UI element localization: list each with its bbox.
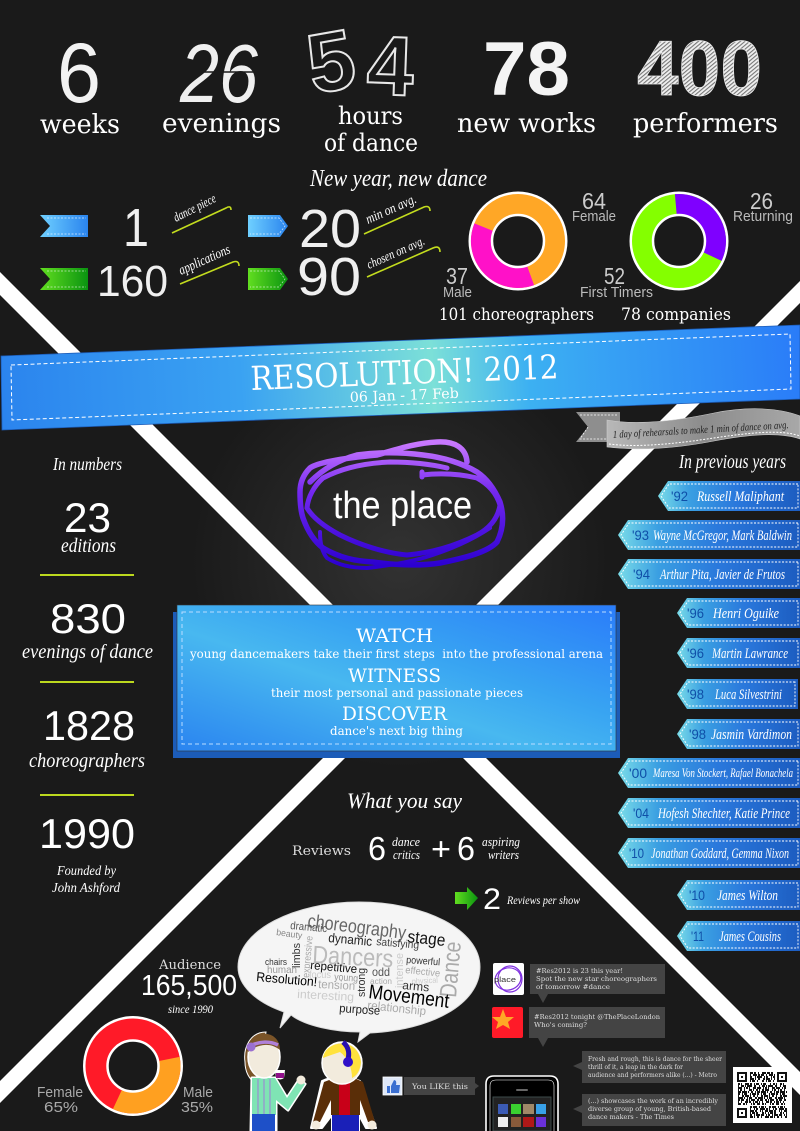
donut: choreographers: Male xyxy=(443,284,472,301)
number 20: 20 xyxy=(299,199,361,259)
stat: 1990 founded: John Ashford xyxy=(52,881,121,896)
note: dance piece: dance piece xyxy=(171,190,218,225)
tag 00 xyxy=(618,758,800,788)
stat: 830 evenings of dance xyxy=(22,595,153,663)
speech bubble word cloud: stage xyxy=(407,927,446,950)
stat: 400 performers: performers xyxy=(633,109,778,139)
donut: choreographers: 37 xyxy=(446,263,468,289)
tag 10 Wilton: '10 xyxy=(689,887,705,903)
stat: 78 new works: new works xyxy=(457,109,596,139)
quote: The Times: (...) showcases the work of an incredibly xyxy=(588,1098,719,1105)
banner: Resolution 2012 xyxy=(1,325,800,430)
stat: 1990 founded xyxy=(39,810,135,896)
tweet: place: of tomorrow #dance xyxy=(536,983,610,991)
process stats xyxy=(40,190,440,307)
tag 94: '94 xyxy=(633,566,650,582)
tag 98 Silvestrini xyxy=(677,679,798,709)
stat: 1828 choreographers: 1828 xyxy=(43,702,135,749)
reviews stats: critics xyxy=(393,847,420,862)
stat: 830 evenings of dance: evenings of dance xyxy=(22,641,153,663)
stat: 1990 founded: 1990 xyxy=(39,810,135,857)
note: chosen on avg: chosen on avg. xyxy=(364,233,427,272)
reviews stats: Reviews per show xyxy=(506,893,580,907)
donut: choreographers: 64 xyxy=(582,188,606,214)
audience stats: 165,500 xyxy=(141,970,237,1002)
speech bubble word cloud: odd xyxy=(372,965,390,979)
totals xyxy=(439,305,731,325)
tag 92 xyxy=(658,481,800,511)
note: min on avg: min on avg. xyxy=(364,192,419,228)
tag 04 xyxy=(618,798,800,828)
number 90: 90 xyxy=(297,247,361,307)
heading: New year, new dance: New year, new dance xyxy=(309,166,487,192)
tweet: tonight xyxy=(492,1007,665,1047)
stat: 400 performers: 400 xyxy=(637,24,762,112)
tag 96 Oguike: Henri Oguike xyxy=(712,606,779,622)
quote: The Times: dance makers - The Times xyxy=(588,1114,674,1121)
stat: 23 editions: editions xyxy=(61,535,116,557)
icon: green arrow xyxy=(455,887,478,910)
stat: 1990 founded: Founded by xyxy=(56,864,117,879)
banner: Resolution 2012: 06 Jan - 17 Feb xyxy=(350,386,459,406)
panel: watch witness discover: DISCOVER xyxy=(342,703,448,725)
tag 98 Vardimon xyxy=(677,719,800,749)
speech bubble word cloud: tension xyxy=(318,977,356,993)
panel: watch witness discover: young dancemakers take their first steps into the professional arena xyxy=(189,646,604,661)
heading: What you say: What you say xyxy=(347,788,462,813)
stat: 78 new works xyxy=(457,27,596,139)
stat: 54 hours of dance: 54 xyxy=(300,11,416,114)
speech bubble word cloud: Resolution! xyxy=(256,969,318,989)
tag 11: '11 xyxy=(691,928,704,944)
tag 96 Oguike: '96 xyxy=(687,605,704,621)
note: dance piece xyxy=(171,190,231,233)
stat: 26 evenings: evenings xyxy=(162,109,281,139)
speech bubble word cloud: limbs xyxy=(291,943,303,968)
speech bubble word cloud: repetitive xyxy=(310,958,358,976)
audience stats xyxy=(141,958,237,1016)
stat: 54 hours of dance xyxy=(300,11,418,157)
grey ribbon note xyxy=(576,409,800,449)
diagonal white cross xyxy=(0,272,800,1103)
audience stats: since 1990 xyxy=(168,1002,213,1016)
figure: woman with wine xyxy=(245,1032,306,1131)
tag 04: '04 xyxy=(633,805,649,821)
tag 10 Goddard: '10 xyxy=(629,845,644,861)
speech bubble word cloud: physical xyxy=(412,976,438,986)
totals: 101 choreographers xyxy=(439,305,594,325)
stat: 54 hours of dance: of dance xyxy=(324,129,418,157)
donut: choreographers xyxy=(443,188,616,301)
reviews stats: dance xyxy=(392,834,420,849)
quote: Metro xyxy=(573,1051,726,1083)
banner: Resolution 2012: RESOLUTION! 2012 xyxy=(250,347,559,398)
speech bubble word cloud: beauty xyxy=(276,927,303,941)
speech bubble word cloud: powerful xyxy=(406,955,440,968)
quote: Metro: Fresh and rough, this is dance for the sheer xyxy=(588,1056,722,1063)
tag 93: '93 xyxy=(632,527,649,543)
speech bubble word cloud: dynamic xyxy=(328,930,373,949)
stat: 830 evenings of dance: 830 xyxy=(50,595,126,642)
reviews stats: 2 xyxy=(483,883,501,916)
figure: man with headphones xyxy=(311,1042,376,1131)
panel: watch witness discover: WATCH xyxy=(356,625,433,647)
reviews stats: + xyxy=(431,831,451,867)
tag 10 Wilton: James Wilton xyxy=(717,888,778,904)
quote: Metro: thrill of it, a leap in the dark for xyxy=(588,1064,683,1071)
reviews stats xyxy=(292,830,580,916)
stat: 6 weeks: weeks xyxy=(40,110,120,140)
quote: Metro: audience and performers alike (...) - Metro xyxy=(588,1072,717,1079)
note: applications xyxy=(177,242,239,284)
panel: watch witness discover xyxy=(173,605,620,758)
tag 96 Oguike xyxy=(677,598,800,628)
speech bubble word cloud: Dance xyxy=(435,940,467,999)
donut: companies: 26 xyxy=(750,188,773,214)
donut: audience: Male xyxy=(183,1084,213,1101)
list: previous years tags xyxy=(618,481,800,951)
speech bubble word cloud: young xyxy=(334,972,358,985)
stat: 78 new works: 78 xyxy=(483,27,570,112)
tweet: place: #Res2012 is 23 this year! xyxy=(536,967,623,975)
panel: watch witness discover: dance's next big thing xyxy=(330,723,463,738)
speech bubble word cloud: chairs xyxy=(265,957,287,967)
QR code xyxy=(733,1067,792,1123)
quote: The Times: diverse group of young, British-based xyxy=(588,1106,711,1113)
speech bubble word cloud: effective xyxy=(405,965,441,980)
logo: the place: the place xyxy=(333,485,472,527)
tweet: tonight: Who's coming? xyxy=(534,1021,588,1029)
tag 94 xyxy=(618,559,800,589)
stat: 23 editions: 23 xyxy=(64,494,111,541)
stat: 6 weeks: 6 xyxy=(57,26,101,120)
tag 92: '92 xyxy=(671,488,688,504)
reviews stats: 6 xyxy=(457,830,475,867)
tag 96 Lawrance: '96 xyxy=(687,645,704,661)
speech bubble word cloud: relationship xyxy=(367,998,427,1018)
icon: blue tag xyxy=(248,215,288,237)
reviews stats: aspiring xyxy=(482,834,520,849)
donut: audience: 35% xyxy=(181,1099,213,1116)
icon: green ribbon xyxy=(40,268,88,290)
number 1: 1 xyxy=(123,198,149,258)
tweet: tonight: #Res2012 tonight @ThePlaceLondon xyxy=(534,1013,660,1021)
left column: in numbers xyxy=(22,454,153,896)
donut: audience: Female xyxy=(37,1084,83,1101)
speech bubble word cloud xyxy=(238,902,480,1042)
tag 00: '00 xyxy=(629,765,647,781)
audience stats: Audience xyxy=(158,958,221,973)
tag 98 Vardimon: '98 xyxy=(689,726,706,742)
stat: 1828 choreographers xyxy=(29,702,145,772)
stat: 26 evenings: 26 xyxy=(179,27,259,120)
speech bubble word cloud: Dancers xyxy=(312,941,394,973)
phone xyxy=(486,1076,558,1131)
tag 11 xyxy=(677,921,800,951)
speech bubble word cloud: human xyxy=(267,965,297,976)
like button xyxy=(383,1077,479,1095)
speech bubble word cloud: arms xyxy=(402,978,430,994)
logo: the place xyxy=(300,442,503,568)
stat: 6 weeks xyxy=(40,26,120,140)
speech bubble word cloud: expressive xyxy=(301,935,316,978)
speech bubble word cloud: strong xyxy=(356,968,368,997)
reviews stats: 6 xyxy=(368,830,386,867)
tag 98 Silvestrini: '98 xyxy=(687,686,704,702)
speech bubble word cloud: Movement xyxy=(367,981,451,1013)
speech bubble word cloud: purpose xyxy=(339,1001,381,1018)
speech bubble word cloud: choreography xyxy=(306,911,408,944)
donut: companies: 52 xyxy=(604,263,625,289)
donut: audience xyxy=(37,1016,213,1116)
number 160: 160 xyxy=(97,257,168,306)
note: applications: applications xyxy=(177,242,233,279)
tag 96 Lawrance xyxy=(677,638,800,668)
stat: 26 evenings xyxy=(162,27,281,139)
speech bubble word cloud: dramatic xyxy=(290,920,328,935)
donut: audience: 65% xyxy=(44,1099,78,1116)
stat: 1828 choreographers: choreographers xyxy=(29,750,145,772)
tag 93 xyxy=(618,520,800,550)
speech bubble word cloud: action xyxy=(370,977,392,986)
stat: 23 editions xyxy=(61,494,116,557)
speech bubble word cloud: focus xyxy=(309,970,331,981)
heading: In numbers: In numbers xyxy=(52,454,122,474)
reviews stats: Reviews xyxy=(292,844,351,859)
donut: choreographers: Female xyxy=(572,208,616,225)
tweet: place xyxy=(493,963,665,1003)
stat: 54 hours of dance: hours xyxy=(338,102,403,130)
donut: companies xyxy=(580,188,793,301)
panel: watch witness discover: their most personal and passionate pieces xyxy=(271,685,523,700)
tweet: place: Spot the new star choreographers xyxy=(536,975,657,983)
speech bubble word cloud: satisfying xyxy=(376,936,420,952)
tag 10 Goddard xyxy=(618,838,800,868)
speech bubble word cloud: interesting xyxy=(297,987,354,1004)
tag 10 Wilton xyxy=(677,880,800,910)
panel: watch witness discover: WITNESS xyxy=(348,665,441,687)
icon: green tag xyxy=(248,268,288,290)
stat: 400 performers xyxy=(633,24,778,139)
totals: 78 companies xyxy=(621,305,731,325)
like button: You LIKE this xyxy=(411,1082,468,1091)
icon: blue ribbon xyxy=(40,215,88,237)
reviews stats: writers xyxy=(488,847,519,862)
donut: companies: Returning xyxy=(733,208,793,225)
tweet: place: place xyxy=(494,977,516,984)
speech bubble word cloud: intense xyxy=(394,953,406,988)
quote: The Times xyxy=(573,1094,726,1126)
donut: companies: First Timers xyxy=(580,284,653,301)
